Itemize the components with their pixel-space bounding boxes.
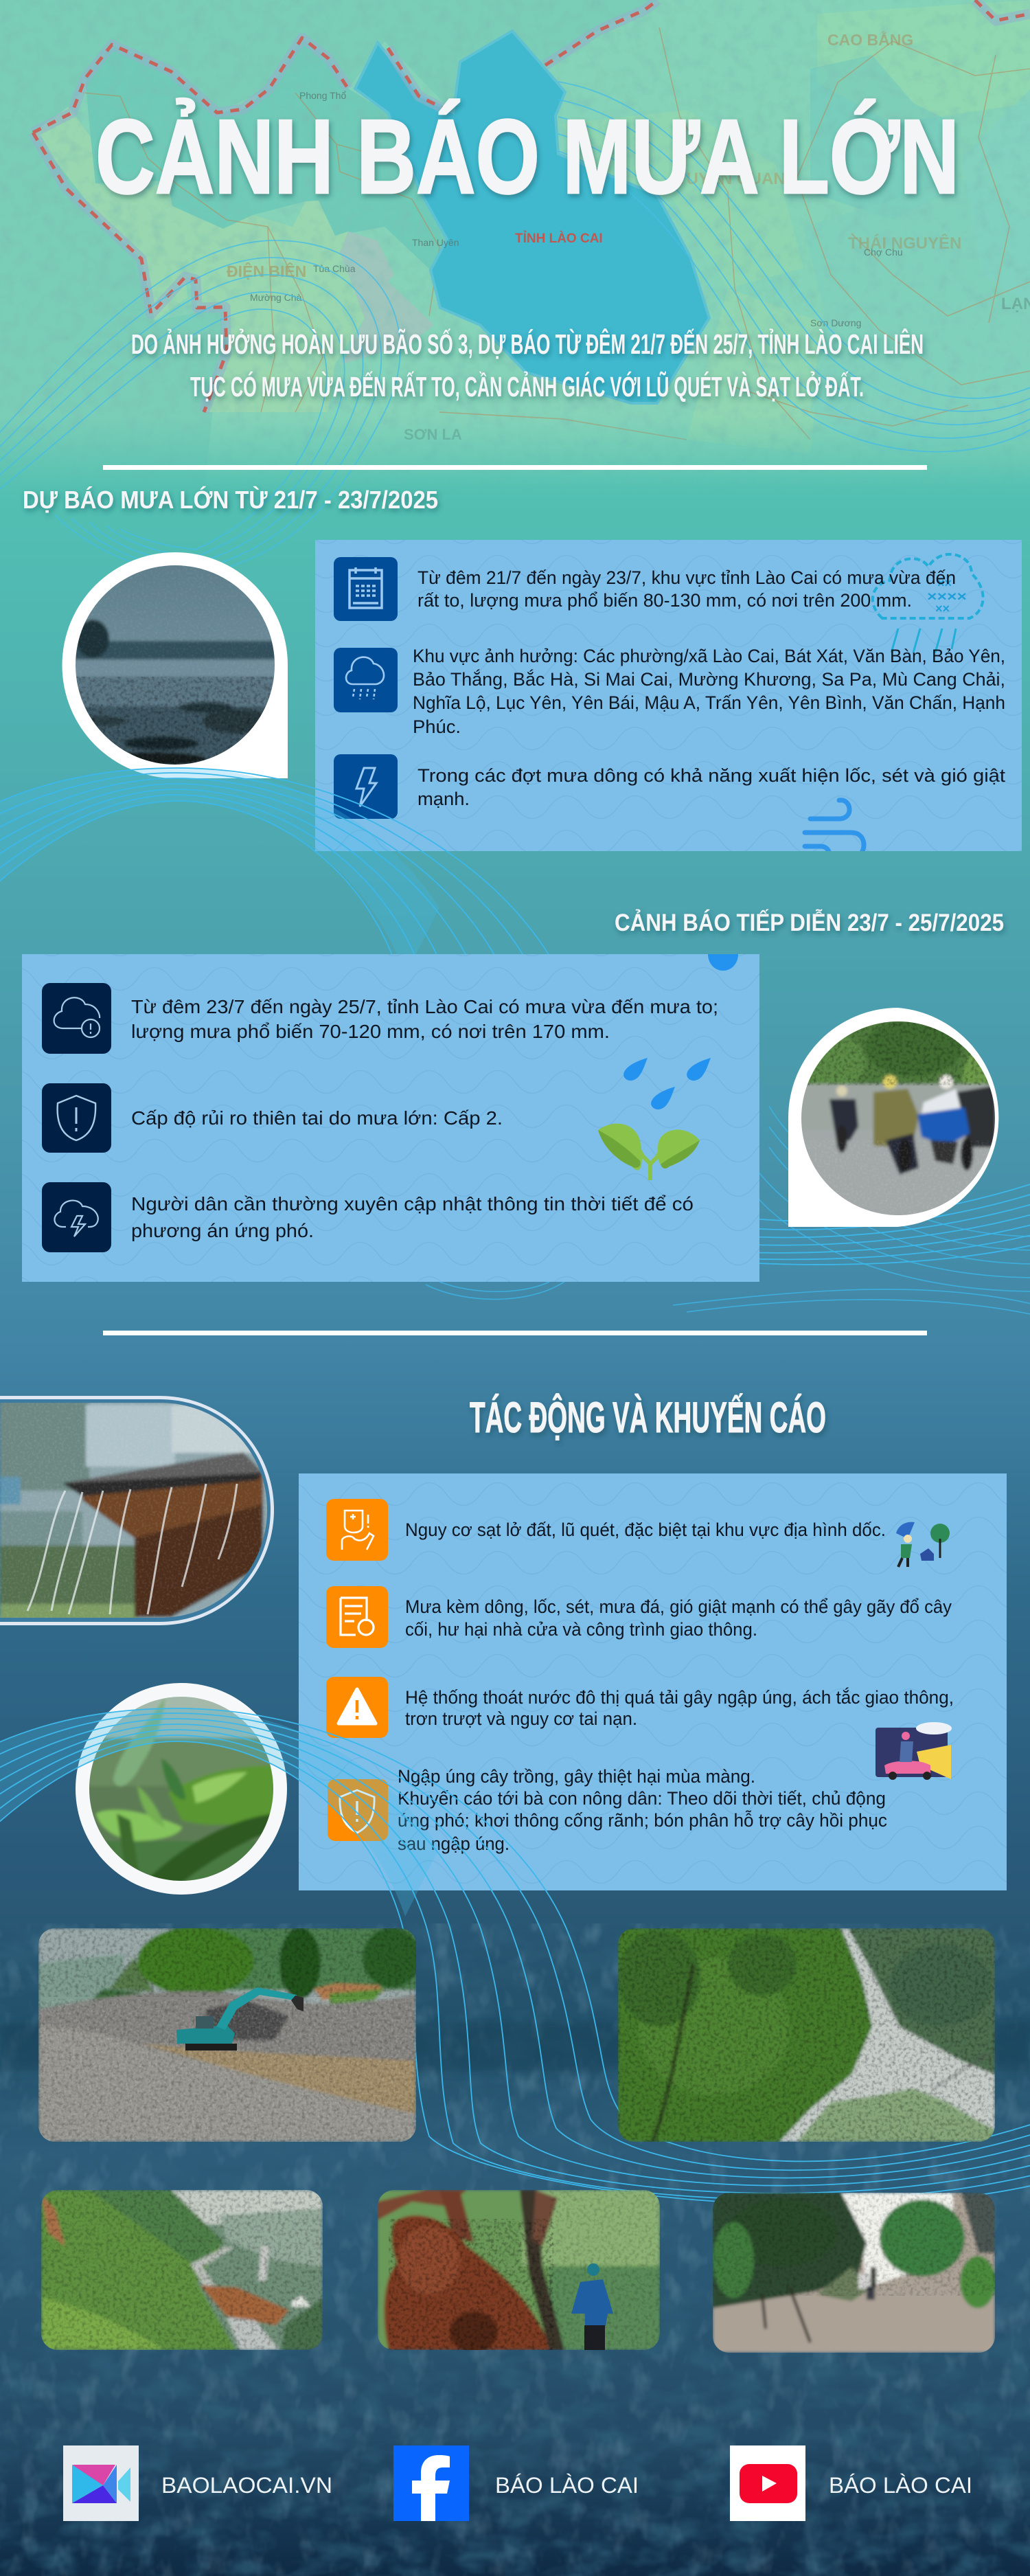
icon: shield warning xyxy=(328,1779,388,1841)
photo: uprooted tree with a man xyxy=(378,2190,660,2353)
map: place names: Than Uyên xyxy=(412,237,459,248)
subtitle xyxy=(131,328,924,403)
text: rainfall 23/7 - 25/7 xyxy=(131,996,718,1042)
map: place names: Mường Chà xyxy=(250,292,302,303)
map: Lao Cai province shape xyxy=(355,31,709,403)
photo: water running off a roof xyxy=(0,1396,275,1625)
divider xyxy=(103,465,927,470)
text: crops and advice to farmers: sau ngập úng. xyxy=(398,1833,510,1854)
decorative wave lines, right swirl xyxy=(426,1106,1030,1315)
photo detail: excavator xyxy=(176,1987,304,2050)
text: storm damage xyxy=(405,1596,952,1640)
icon: facebook logo xyxy=(393,2445,469,2521)
decorative wave lines, lower xyxy=(0,1708,1030,2205)
icon: lightning xyxy=(334,754,398,819)
text: rainfall 23/7 - 25/7: lượng mưa phổ biến 70-120 mm, có nơi trên 170 mm. xyxy=(131,1021,610,1042)
icon: decorative dashed rain cloud: ×××× xyxy=(927,589,967,605)
text: affected areas xyxy=(413,646,1005,737)
text: crops and advice to farmers: Ngập úng cây trồng, gây thiệt hại mùa màng. xyxy=(398,1766,755,1787)
icon: decorative wind xyxy=(805,800,864,859)
icon: decorative dashed rain cloud xyxy=(873,554,983,653)
map: road lines xyxy=(82,27,1030,440)
text: storm warning: mạnh. xyxy=(417,789,470,809)
text: urban flooding xyxy=(405,1686,954,1729)
text: storm warning xyxy=(417,765,1006,809)
label: website: BAOLAOCAI.VN xyxy=(161,2473,332,2498)
text: landslide risk: Nguy cơ sạt lở đất, lũ quét, đặc biệt tại khu vực địa hình dốc. xyxy=(405,1519,886,1540)
icon: shield alert xyxy=(42,1083,111,1153)
text: storm damage: Mưa kèm dông, lốc, sét, mưa đá, gió giật mạnh có thể gây gãy đổ cây xyxy=(405,1596,952,1617)
map: place names: THÁI NGUYÊN xyxy=(848,234,961,253)
text: affected areas: Phúc. xyxy=(413,716,461,737)
photo: flooded city street xyxy=(713,2193,996,2353)
icon: decorative dashed rain cloud: ×× xyxy=(935,602,950,615)
text: risk level: Cấp độ rủi ro thiên tai do mưa lớn: Cấp 2. xyxy=(131,1107,503,1129)
text: rainfall 23/7 - 25/7: Từ đêm 23/7 đến ngày 25/7, tỉnh Lào Cai có mưa vừa đến mưa to; xyxy=(131,996,718,1017)
text: urban flooding: Hệ thống thoát nước đô thị quá tải gây ngập úng, ách tắc giao thông, xyxy=(405,1686,954,1708)
icon: person with umbrella and tree xyxy=(896,1522,950,1567)
icon: drop at panel top xyxy=(708,941,738,971)
decorative wave lines, top xyxy=(0,82,1030,576)
photo: leaves in rain in white circle xyxy=(76,1683,287,1895)
icon: report xyxy=(326,1586,388,1648)
photo: trees in the rain xyxy=(618,1928,995,2142)
photo: excavator on flood-damaged riverbed xyxy=(38,1927,420,2142)
map: place names: Chợ Chu xyxy=(864,247,903,258)
footer: facebook xyxy=(393,2445,639,2521)
map: place names: TUYÊN QUANG xyxy=(676,169,798,188)
decorative wave lines, middle xyxy=(0,768,1030,1265)
text: affected areas: Khu vực ảnh hưởng: Các phường/xã Lào Cai, Bát Xát, Văn Bàn, Bảo Yên, xyxy=(413,646,1005,666)
divider xyxy=(103,1331,927,1335)
photo: landslide on mountain road xyxy=(41,2190,323,2350)
photo: rain on water in white teardrop frame xyxy=(62,552,288,778)
text: affected areas: Nghĩa Lộ, Lục Yên, Yên Bái, Mậu A, Trấn Yên, Yên Bình, Văn Chấn, Hạnh xyxy=(413,692,1005,713)
map: Dien Bien region xyxy=(33,106,365,412)
label: facebook: BÁO LÀO CAI xyxy=(495,2473,639,2498)
map: place names: Phong Thổ xyxy=(299,90,346,101)
map: place names: SƠN LA xyxy=(404,426,462,443)
panel: continuing warning xyxy=(22,941,759,1282)
text: crops and advice to farmers xyxy=(398,1766,887,1854)
panel: impacts xyxy=(299,1473,1007,1890)
text: storm warning: Trong các đợt mưa dông có khả năng xuất hiện lốc, sét và gió giật xyxy=(417,765,1006,786)
map: place names: Sơn Dương xyxy=(810,317,861,328)
icon: rain cloud xyxy=(334,648,398,712)
panel: forecast xyxy=(315,540,1022,859)
text: keep updated xyxy=(131,1193,694,1241)
map: place names: ĐIỆN BIÊN xyxy=(227,262,306,280)
icon: cloud alert xyxy=(42,983,111,1054)
footer: website xyxy=(63,2445,332,2521)
text: storm damage: cối, hư hại nhà cửa và công trình giao thông. xyxy=(405,1619,757,1640)
map: place names: TỈNH LÀO CAI xyxy=(515,231,603,246)
text: rainfall forecast: Từ đêm 21/7 đến ngày 23/7, khu vực tỉnh Lào Cai có mưa vừa đến xyxy=(417,567,956,588)
heading: forecast 21/7 - 23/7: DỰ BÁO MƯA LỚN TỪ 21/7 - 23/7/2025 xyxy=(23,485,438,514)
text: keep updated: Người dân cần thường xuyên cập nhật thông tin thời tiết để có xyxy=(131,1193,694,1214)
text: rainfall forecast: rất to, lượng mưa phổ biến 80-130 mm, có nơi trên 200 mm. xyxy=(417,590,912,611)
icon: falling water drops xyxy=(623,1058,711,1109)
text: keep updated: phương án ứng phó. xyxy=(131,1220,314,1241)
icon: calendar xyxy=(334,557,398,621)
text: rainfall forecast xyxy=(417,567,956,611)
photo: motorbikes in rain in white teardrop frame xyxy=(788,1008,1003,1227)
map: place names xyxy=(227,30,1030,443)
icon: storm cloud xyxy=(42,1182,111,1252)
background: rain on water, bottom xyxy=(0,1890,1030,2576)
map: place names: Tủa Chùa xyxy=(313,263,356,274)
icon: warning triangle xyxy=(326,1677,388,1738)
photo detail: man in blue raincoat xyxy=(571,2263,613,2350)
icon: decorative dashed rain cloud: ×× xyxy=(937,576,952,590)
background map of northern Vietnam xyxy=(0,0,1030,495)
icon: website logo xyxy=(63,2445,139,2521)
icon: scooter in the rain xyxy=(876,1722,952,1780)
footer: youtube xyxy=(730,2445,972,2521)
map: place names: CAO BẰNG xyxy=(827,30,913,49)
icon: worker xyxy=(326,1499,388,1561)
map: national border xyxy=(33,0,1030,412)
text: urban flooding: trơn trượt và nguy cơ tai nạn. xyxy=(405,1708,637,1729)
icon: green sprout xyxy=(598,1124,700,1180)
text: crops and advice to farmers: ứng phó; khơi thông cống rãnh; bón phân hỗ trợ cây hồi phục xyxy=(398,1809,887,1831)
label: youtube: BÁO LÀO CAI xyxy=(829,2473,972,2498)
text: crops and advice to farmers: Khuyến cáo tới bà con nông dân: Theo dõi thời tiết, chủ động xyxy=(398,1788,886,1809)
text: affected areas: Bảo Thắng, Bắc Hà, Si Mai Cai, Mường Khương, Sa Pa, Mù Cang Chải, xyxy=(413,668,1005,690)
icon: youtube logo xyxy=(730,2445,805,2521)
